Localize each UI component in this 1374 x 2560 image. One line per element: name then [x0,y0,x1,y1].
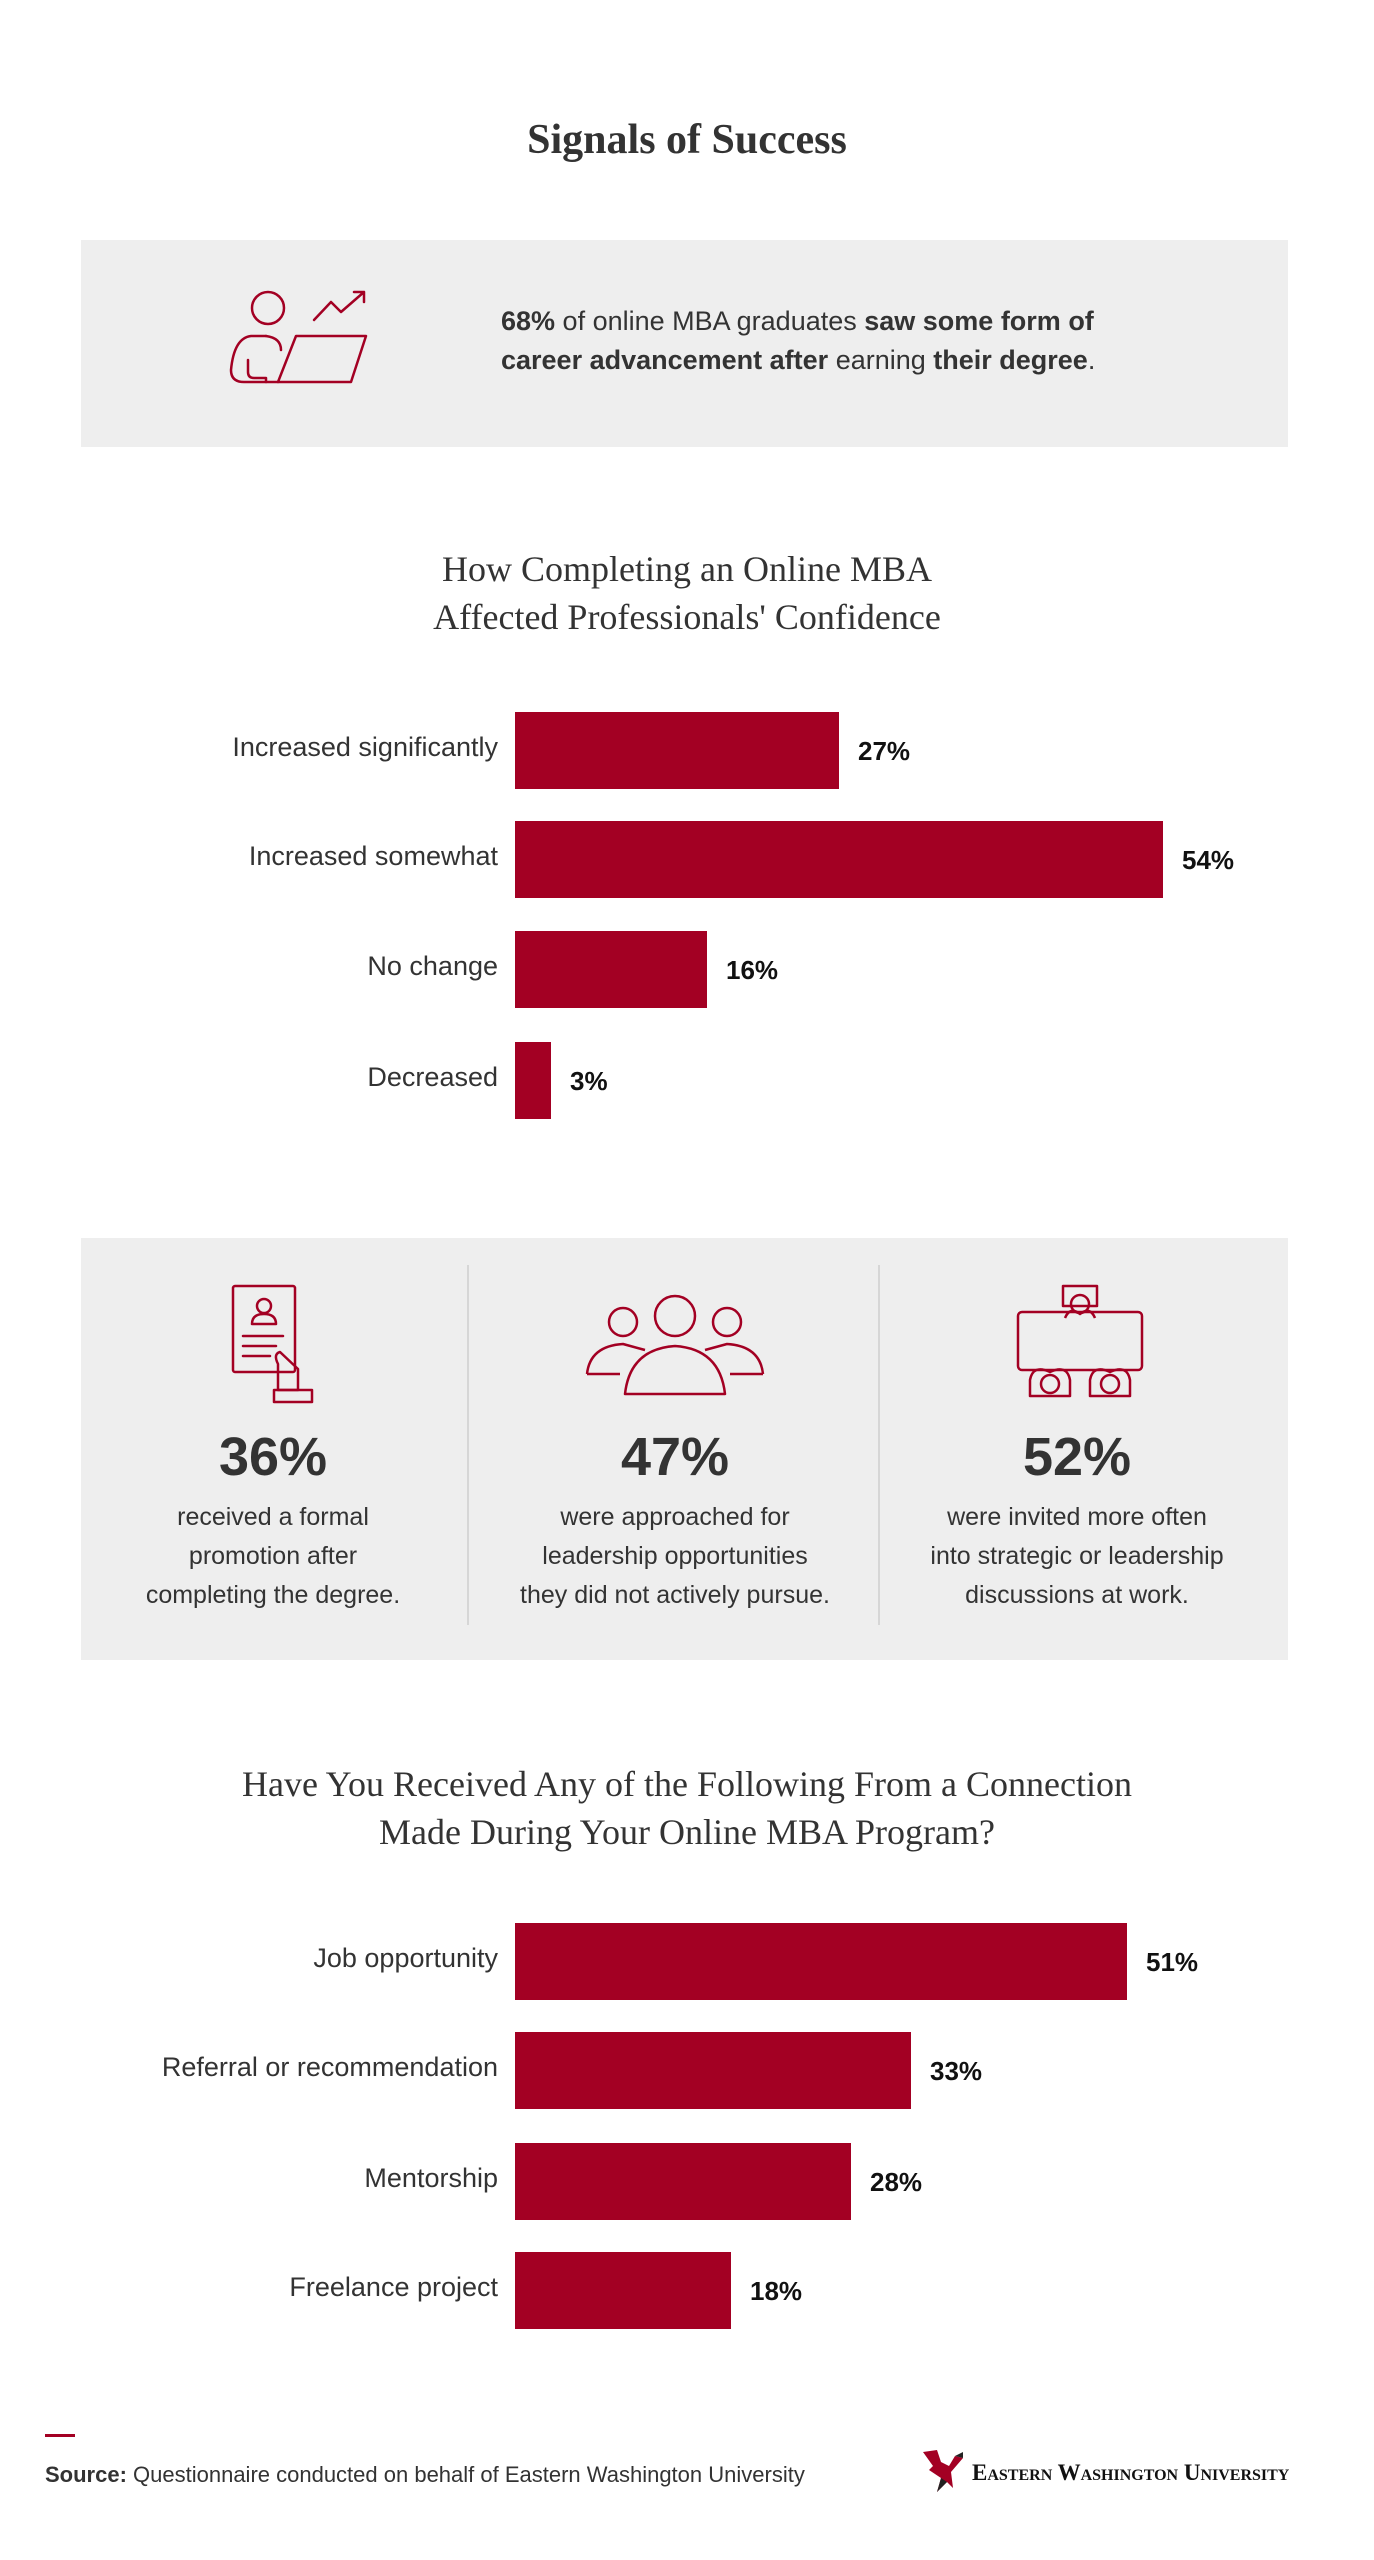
bar: increased somewhat [249,821,1234,898]
stat column: strategic discussions [930,1284,1224,1609]
chart title: connections: Made During Your Online MBA Program? [379,1812,995,1852]
source note: Source: Questionnaire conducted on behalf of Eastern Washington University [45,2462,805,2487]
stat column: promotion: promotion after [189,1542,357,1570]
icon: meeting table [1016,1284,1144,1398]
bar: increased somewhat: Increased somewhat [249,841,498,871]
bar: decreased [367,1042,608,1119]
bar: increased somewhat: 54% [1182,845,1234,875]
chart title: confidence: Affected Professionals' Confidence [433,597,941,637]
bar: increased significantly [232,712,910,789]
stat column: leadership opportunities [520,1294,830,1609]
stat column: leadership opportunities: 47% [621,1427,729,1487]
stat column: leadership opportunities: were approached for [560,1503,790,1531]
bar: job opportunity [313,1923,1198,2000]
logo: Eastern Washington University: Eastern Washington University [972,2460,1289,2485]
bar: increased significantly: Increased significantly [232,732,498,762]
bar: no change [367,931,778,1008]
chart title: connections [242,1764,1132,1852]
stat column: promotion: 36% [219,1427,327,1487]
text: 68% stat: 68% of online MBA graduates saw some form of [501,306,1094,336]
title: Signals of Success [527,117,847,163]
bar chart: confidence [232,712,1234,1119]
stat column: promotion: received a formal [177,1503,369,1531]
panel: stats [81,1238,1288,1660]
bar: decreased: Decreased [367,1062,498,1092]
bar chart: connections [162,1923,1198,2329]
chart title: connections: Have You Received Any of the Following From a Connection [242,1764,1132,1804]
icon: group of people [586,1294,764,1396]
stat column: strategic discussions: into strategic or leadership [930,1542,1224,1570]
panel: career advancement [81,240,1288,447]
bar: increased significantly: 27% [858,736,910,766]
bar: mentorship [364,2143,922,2220]
bar: mentorship: Mentorship [364,2163,498,2193]
stat column: leadership opportunities: they did not actively pursue. [520,1581,830,1609]
stat column: leadership opportunities: leadership opportunities [542,1542,808,1570]
text: 68% stat [501,306,1095,375]
bar: referral: Referral or recommendation [162,2052,498,2082]
stat column: promotion: completing the degree. [146,1581,400,1609]
chart title: confidence [433,549,941,637]
bar: no change: No change [367,951,498,981]
logo: Eastern Washington University [923,2450,1289,2492]
bar: freelance project: Freelance project [289,2272,498,2302]
stat column: promotion [146,1284,400,1609]
bar: freelance project: 18% [750,2276,802,2306]
icon: person at laptop with growth arrow [230,290,368,384]
bar: decreased: 3% [570,1066,608,1096]
chart title: confidence: How Completing an Online MBA [442,549,932,589]
icon: resume in hand [232,1284,314,1404]
bar: freelance project [289,2252,802,2329]
bar: job opportunity: Job opportunity [313,1943,498,1973]
bar: referral [162,2032,982,2109]
stat column: strategic discussions: discussions at work. [965,1581,1189,1609]
text: 68% stat: career advancement after earning their degree. [501,345,1095,375]
stat column: strategic discussions: were invited more often [947,1503,1207,1531]
stat column: strategic discussions: 52% [1023,1427,1131,1487]
bar: no change: 16% [726,955,778,985]
bar: referral: 33% [930,2056,982,2086]
bar: mentorship: 28% [870,2167,922,2197]
bar: job opportunity: 51% [1146,1947,1198,1977]
